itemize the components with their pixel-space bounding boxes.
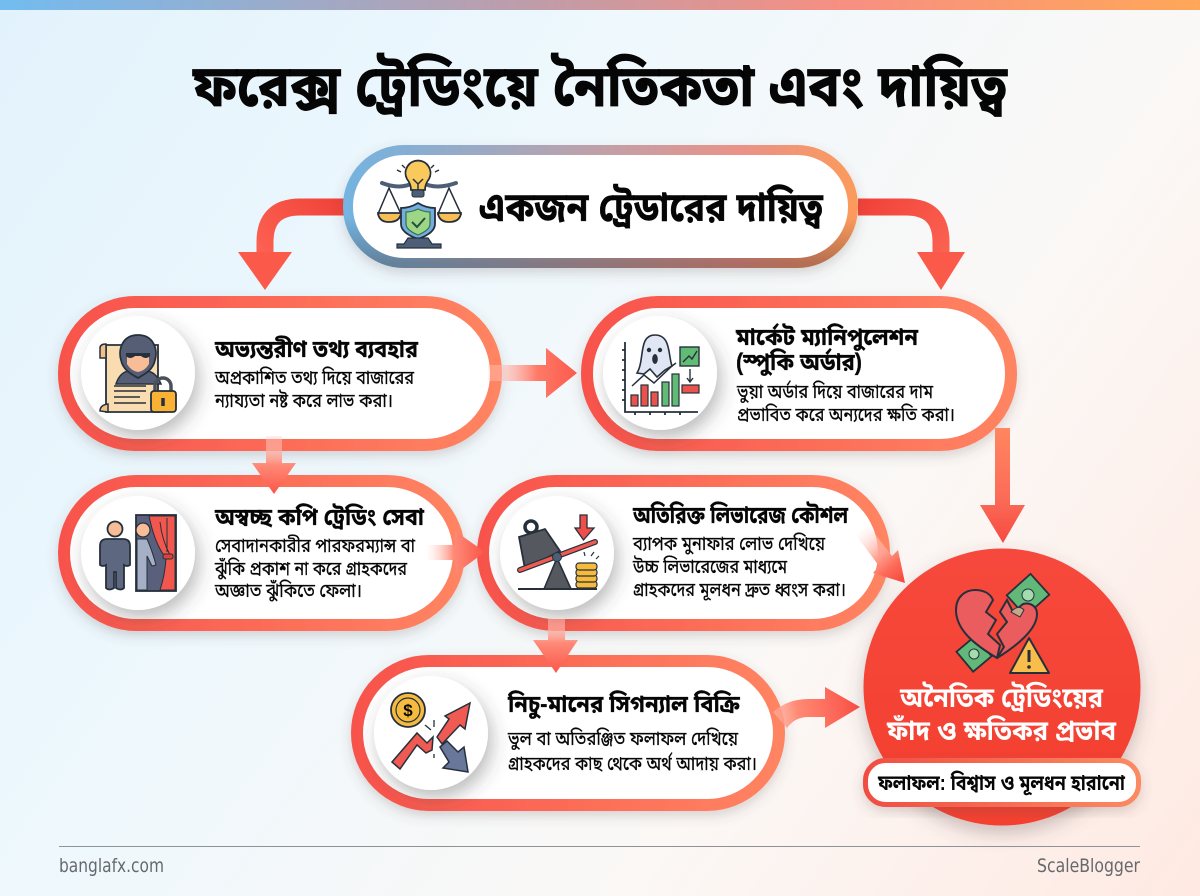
description: market manipulation: প্রভাবিত করে অন্যদের ক্ষতি করা। bbox=[737, 403, 955, 426]
panel: low quality signal sales bbox=[357, 661, 779, 805]
heading: low quality signal sales: নিচু-মানের সিগন্যাল বিক্রি bbox=[507, 690, 740, 720]
arrow: signals to consequences bbox=[773, 687, 860, 728]
arrow: responsibility to insider information bbox=[238, 207, 345, 290]
panel: market manipulation bbox=[587, 302, 1011, 445]
description: low quality signal sales: গ্রাহকদের কাছ থেকে অর্থ আদায় করা। bbox=[508, 752, 757, 775]
heading: insider information: অভ্যন্তরীণ তথ্য ব্যবহার bbox=[214, 335, 418, 363]
description: market manipulation: ভুয়া অর্ডার দিয়ে বাজারের দাম bbox=[736, 380, 933, 403]
arrow: responsibility to market manipulation bbox=[858, 207, 965, 290]
description: excessive leverage bbox=[632, 532, 846, 601]
arrow: market manipulation to consequences bbox=[980, 428, 1025, 543]
footer: site name: banglafx.com bbox=[59, 855, 164, 877]
heading: consequences: অনৈতিক ট্রেডিংয়ের bbox=[899, 681, 1104, 713]
heading: consequences bbox=[886, 681, 1117, 746]
panel: consequences circle bbox=[864, 548, 1140, 826]
icon: ghost chart bbox=[603, 316, 717, 430]
callout: result bbox=[866, 760, 1138, 804]
callout: result: ফলাফল: বিশ্বাস ও মূলধন হারানো bbox=[877, 771, 1126, 795]
title: ফরেক্স ট্রেডিংয়ে নৈতিকতা এবং দায়িত্ব bbox=[192, 52, 1008, 119]
description: opaque copy trading: সেবাদানকারীর পারফরম্যান্স বা bbox=[215, 534, 416, 557]
icon: broken arrows with coin: $ bbox=[403, 701, 413, 720]
icon: broken arrows with coin bbox=[374, 676, 488, 790]
icon: broken heart with money and warning bbox=[956, 574, 1049, 673]
arrow: insider information to market manipulation bbox=[488, 348, 577, 398]
arrow: leverage to signals bbox=[533, 618, 578, 673]
description: excessive leverage: উচ্চ লিভারেজের মাধ্যমে bbox=[632, 555, 787, 578]
heading: excessive leverage: অতিরিক্ত লিভারেজ কৌশল bbox=[632, 501, 849, 529]
description: insider information: ন্যায্যতা নষ্ট করে লাভ করা। bbox=[214, 389, 393, 412]
description: excessive leverage: গ্রাহকদের মূলধন দ্রুত ধ্বংস করা। bbox=[633, 580, 846, 601]
panel: insider information bbox=[64, 302, 496, 445]
description: excessive leverage: ব্যাপক মুনাফার লোভ দেখিয়ে bbox=[632, 532, 826, 555]
description: low quality signal sales bbox=[507, 727, 757, 775]
description: low quality signal sales: ভুল বা অতিরঞ্জিত ফলাফল দেখিয়ে bbox=[507, 727, 739, 750]
heading: market manipulation: মার্কেট ম্যানিপুলেশন bbox=[735, 323, 919, 351]
panel: excessive leverage bbox=[483, 481, 884, 625]
icon: hacker with scroll and lock bbox=[81, 316, 195, 430]
description: insider information: অপ্রকাশিত তথ্য দিয়ে বাজারের bbox=[214, 366, 415, 389]
icon: person and curtain bbox=[81, 496, 195, 610]
icon: leverage seesaw bbox=[500, 496, 614, 610]
description: opaque copy trading bbox=[214, 534, 416, 602]
footer: credit: ScaleBlogger bbox=[1037, 855, 1140, 877]
description: insider information bbox=[214, 366, 415, 412]
panel: opaque copy trading bbox=[64, 481, 459, 625]
top gradient bar bbox=[0, 0, 1200, 10]
heading: market manipulation: (স্পুকি অর্ডার) bbox=[736, 348, 862, 376]
heading: consequences: ফাঁদ ও ক্ষতিকর প্রভাব bbox=[886, 714, 1117, 746]
heading: trader responsibility: একজন ট্রেডারের দায়িত্ব bbox=[479, 185, 824, 230]
arrow: insider information to copy trading bbox=[252, 436, 296, 494]
description: opaque copy trading: ঝুঁকি প্রকাশ না করে গ্রাহকদের bbox=[214, 557, 408, 580]
heading: opaque copy trading: অস্বচ্ছ কপি ট্রেডিং সেবা bbox=[214, 503, 425, 531]
icon: scales with bulb and shield bbox=[378, 161, 461, 248]
description: market manipulation bbox=[736, 380, 955, 426]
heading: market manipulation bbox=[735, 323, 919, 376]
arrow: copy trading to leverage bbox=[428, 531, 485, 574]
description: opaque copy trading: অজ্ঞাত ঝুঁকিতে ফেলা। bbox=[214, 579, 362, 602]
panel: trader responsibility bbox=[348, 150, 853, 263]
arrow: leverage to consequences bbox=[856, 525, 905, 583]
